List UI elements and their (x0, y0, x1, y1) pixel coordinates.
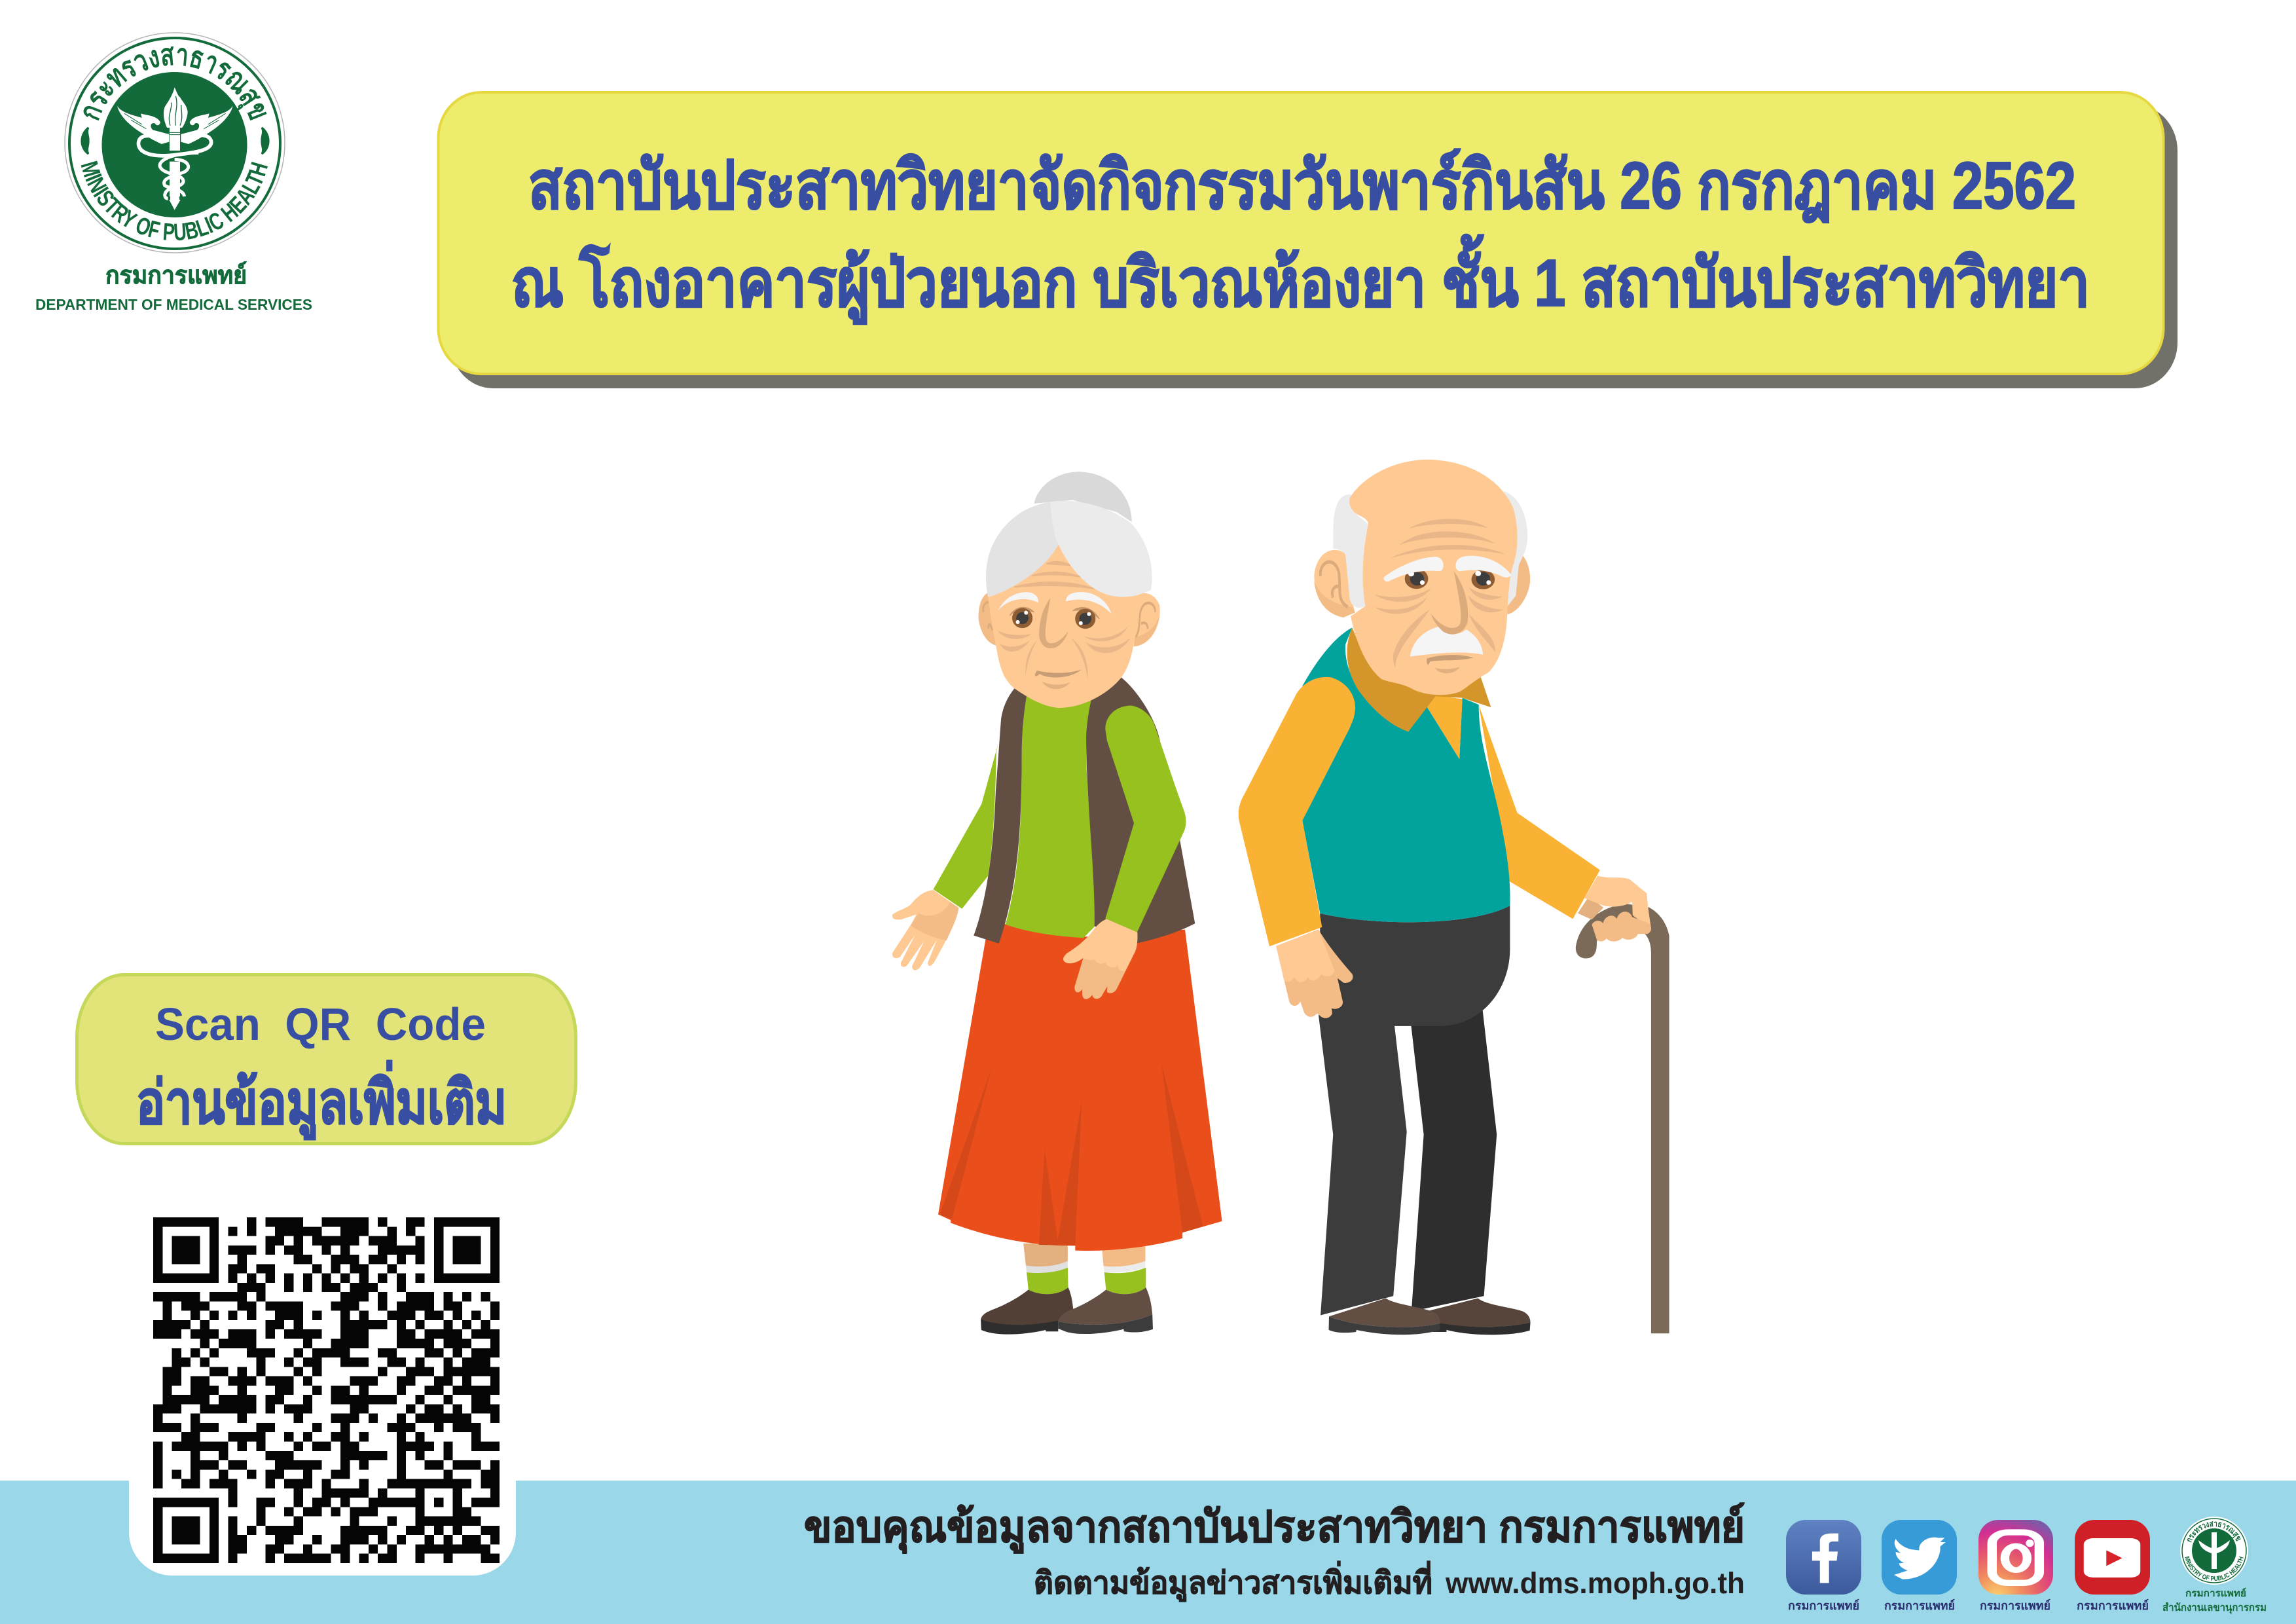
illustration: elderly man with cane (1239, 460, 1669, 1335)
footer credit line: ขอบคุณข้อมูลจากสถาบันประสาทวิทยา กรมการแพทย์ (804, 1503, 1745, 1553)
icon: Facebook (1786, 1520, 1861, 1595)
footer band (0, 1481, 2296, 1624)
QR modules (153, 1217, 500, 1563)
social icons row (1786, 1517, 2267, 1614)
icon: small ministry seal: MINISTRY OF PUBLIC HEALTH (2185, 1556, 2244, 1581)
Scan QR panel (77, 974, 576, 1143)
title line 2: ณ โถงอาคารผู้ป่วยนอก บริเวณห้องยา ชั้น 1 สถาบันประสาทวิทยา (511, 234, 2090, 325)
label: Facebook department: กรมการแพทย์ (1788, 1598, 1859, 1612)
man head (1314, 460, 1530, 695)
seal emblem: torch, wings, snake (117, 87, 233, 210)
seal text: English: MINISTRY OF PUBLIC HEALTH (81, 161, 268, 241)
icon: small ministry seal (2180, 1517, 2248, 1585)
Scan QR Code label: Scan QR Code (155, 999, 486, 1050)
panel shadow (450, 105, 2178, 388)
title line 1: สถาบันประสาทวิทยาจัดกิจกรรมวันพาร์กินสัน 26 กรกฎาคม 2562 (528, 148, 2076, 224)
label: Instagram department: กรมการแพทย์ (1980, 1598, 2050, 1612)
panel body (439, 92, 2163, 374)
label: YouTube department: กรมการแพทย์ (2077, 1598, 2149, 1612)
icon: Twitter (1882, 1520, 1957, 1595)
label: seal department: กรมการแพทย์ (2185, 1587, 2246, 1599)
woman right hand (1063, 919, 1137, 999)
woman lower body: legs, shoes, skirt (938, 924, 1222, 1335)
panel body (77, 974, 576, 1143)
website URL: www.dms.moph.go.th (1445, 1566, 1745, 1600)
seal ornament right (262, 128, 268, 154)
Thai read more label: อ่านข้อมูลเพิ่มเติม (136, 1060, 507, 1140)
icon: Instagram (1978, 1520, 2053, 1595)
icon: YouTube (2075, 1520, 2150, 1595)
woman head (979, 471, 1160, 708)
woman upper body: vest, shirt, arms, left hand (892, 677, 1195, 970)
seal ornament left (82, 128, 88, 154)
man lower body: cane, legs, shoes (1319, 904, 1669, 1335)
man left hand (1276, 929, 1353, 1018)
seal text: Thai: กระทรวงสาธารณสุข (84, 46, 267, 120)
department name English: DEPARTMENT OF MEDICAL SERVICES (35, 296, 312, 313)
illustration: elderly woman (892, 471, 1222, 1335)
department name Thai: กรมการแพทย์ (105, 261, 247, 289)
logo: Ministry of Public Health seal (64, 32, 285, 253)
QR code with white card (129, 1217, 516, 1576)
man upper body: shirt, vest, pants, collar, sleeves, hand on cane (1239, 627, 1651, 1026)
follow-us Thai text: ติดตามข้อมูลข่าวสารเพิ่มเติมที่ (1034, 1561, 1432, 1602)
title panel (439, 92, 2178, 388)
white card (129, 1441, 516, 1576)
icon: small ministry seal: กระทรวงสาธารณสุข (2187, 1521, 2241, 1543)
label: secretary office: สำนักงานเลขานุการกรม (2162, 1602, 2267, 1614)
footer website line (1034, 1561, 1745, 1602)
label: Twitter department: กรมการแพทย์ (1884, 1598, 1955, 1612)
